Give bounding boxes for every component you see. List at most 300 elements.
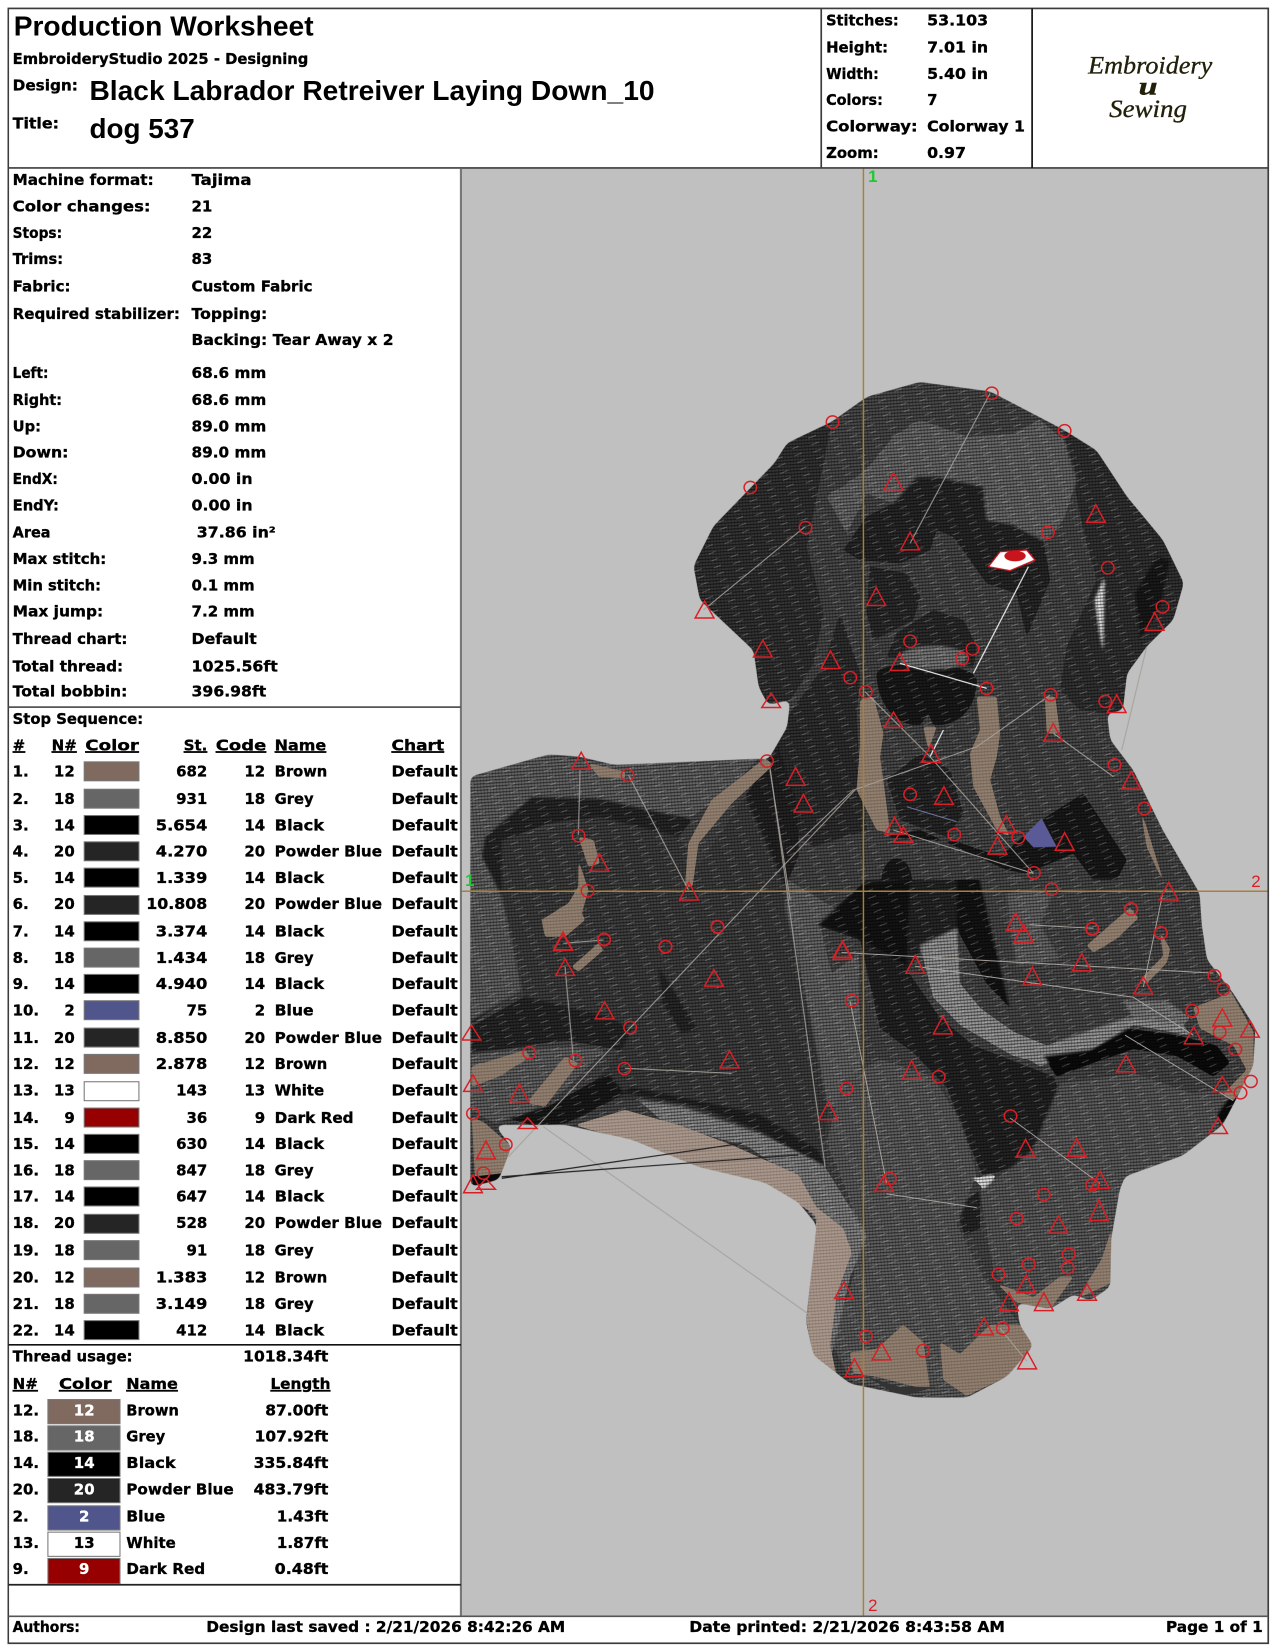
header panel: design statistics (826, 11, 1025, 162)
stop rows: 630 (176, 1135, 207, 1153)
thread rows (13, 1401, 328, 1578)
stop rows: Black (275, 1321, 325, 1339)
stitch hatch overlay (463, 374, 1263, 1405)
stop rows: Default (391, 923, 458, 941)
stop rows: Default (391, 1295, 458, 1313)
stop rows (13, 763, 458, 1339)
stop rows: Default (391, 790, 458, 808)
stop rows: 14 (54, 1188, 75, 1206)
stop rows: 12 (244, 763, 265, 781)
thread rows: Dark Red (126, 1560, 205, 1578)
stop rows: 18 (244, 949, 265, 967)
head patches (693, 420, 1183, 902)
panel: thread usage table (13, 1348, 330, 1584)
stop rows: 14 (54, 816, 75, 834)
dark jumps to the hind toe (502, 1143, 798, 1178)
stop rows: 18. (13, 1214, 39, 1232)
stop rows: 1. (13, 763, 29, 781)
stop rows: 6. (13, 895, 29, 913)
stop rows: Powder Blue (275, 895, 382, 913)
panel: machine and design details: 37.86 in² (197, 524, 276, 542)
axis labels: 2 (868, 1596, 878, 1615)
stop rows: 18 (54, 1241, 75, 1259)
header panel: design statistics: 7.01 in (927, 39, 988, 57)
stop rows: 18 (244, 1161, 265, 1179)
axis labels: 1 (868, 167, 878, 186)
stop rows: Grey (275, 1241, 314, 1259)
stop rows: 3.149 (156, 1295, 207, 1313)
panel: machine and design details: Max stitch: (13, 550, 106, 568)
panel: machine and design details: Backing: Tear Away x 2 (192, 331, 394, 349)
blue jump by the chin (907, 807, 957, 822)
footer: authors, dates and page number: Date printed: 2/21/2026 8:43:58 AM (689, 1618, 1005, 1636)
stop rows: Default (391, 1188, 458, 1206)
chin shadow (887, 753, 963, 837)
stop rows: 12 (54, 1055, 75, 1073)
header panel: design statistics: Height: (826, 39, 888, 57)
grey jumps on the body (508, 768, 855, 1315)
right leg (980, 1073, 1233, 1309)
dark band diagonal (860, 939, 1060, 1177)
stop rows: 7. (13, 923, 29, 941)
stop rows: 3.374 (156, 923, 207, 941)
left ear (693, 422, 832, 705)
paw black fringe (1043, 1028, 1230, 1077)
thread rows: Powder Blue (126, 1480, 234, 1498)
thread rows: Brown (126, 1401, 179, 1419)
table header row: Color (85, 736, 140, 754)
dog body stitching clipped to silhouette (463, 374, 1263, 1405)
stop rows: 15. (13, 1135, 39, 1153)
thread rows: 20 (74, 1480, 95, 1498)
right flank (978, 878, 1182, 1042)
thread rows: 2 (79, 1508, 89, 1526)
stop rows: Grey (275, 1161, 314, 1179)
stop rows: Default (391, 1161, 458, 1179)
stop rows: 20 (244, 1214, 265, 1232)
stop rows: 91 (187, 1241, 207, 1259)
chest top grey (1004, 877, 1024, 881)
right leg shadow (958, 1191, 995, 1292)
stop rows: 20 (54, 895, 75, 913)
colour swatches (84, 762, 139, 1340)
thread rows: 18. (13, 1428, 39, 1446)
stop rows: 14 (244, 869, 265, 887)
panel: machine and design details: Custom Fabric (192, 277, 313, 295)
thread table header: Length (270, 1375, 330, 1393)
light patch (920, 928, 1043, 1063)
thread table header (13, 1375, 330, 1393)
stop rows: 22. (13, 1321, 39, 1339)
back and flank patches (470, 747, 862, 1220)
right ear flap (1135, 557, 1170, 640)
panel: machine and design details: 0.00 in (192, 470, 253, 488)
upper stop markers: triangles and circles (554, 387, 1178, 959)
hatch over brown thread (463, 374, 1263, 1405)
flank grey (1007, 890, 1060, 966)
stop rows: Powder Blue (275, 843, 382, 861)
chest dark (745, 747, 798, 887)
panel: machine and design details: 89.0 mm (192, 444, 266, 462)
stop rows: Default (391, 843, 458, 861)
muzzle top (887, 610, 977, 667)
stop rows: 19. (13, 1241, 39, 1259)
eye (988, 550, 1035, 571)
thread rows: Blue (126, 1508, 165, 1526)
stop rows: Black (275, 923, 325, 941)
panel: machine and design details: Stops: (13, 224, 62, 242)
table header row: N# (52, 736, 77, 754)
paw toe shadows (867, 1377, 937, 1396)
stop rows: 682 (176, 763, 207, 781)
design preview canvas (461, 168, 1268, 1616)
brown flank marks (472, 758, 823, 1220)
thread rows: 87.00ft (265, 1401, 328, 1419)
stop rows: Default (391, 949, 458, 967)
ear gap (1095, 578, 1104, 650)
lower left lighter zone (472, 1047, 605, 1123)
panel: machine and design details: Max jump: (13, 603, 103, 621)
thread rows: Grey (126, 1428, 165, 1446)
stop rows: 12. (13, 1055, 39, 1073)
lower stop markers: triangles and circles (462, 903, 1259, 1377)
thread usage total: Thread usage: (13, 1348, 133, 1366)
stop rows: 14 (54, 1321, 75, 1339)
stop rows: 143 (176, 1081, 207, 1099)
stop rows: 647 (176, 1188, 207, 1206)
stop rows: 14 (54, 869, 75, 887)
header panel: design statistics: Stitches: (826, 11, 899, 29)
panel: machine and design details: 7.2 mm (192, 603, 255, 621)
thread rows: 14 (74, 1454, 95, 1472)
dark stripe (472, 997, 632, 1053)
stop rows: 20 (244, 895, 265, 913)
stop rows: Default (391, 1081, 458, 1099)
stop rows: 18 (244, 1241, 265, 1259)
stop rows: 21. (13, 1295, 39, 1313)
blue collar tag (1023, 818, 1057, 847)
neck side (763, 613, 867, 847)
stop rows: 412 (176, 1321, 207, 1339)
stop rows: 20 (54, 1029, 75, 1047)
stop rows: 18 (54, 949, 75, 967)
software line: EmbroideryStudio 2025 - Designing (13, 50, 308, 68)
stop rows: 9 (64, 1109, 75, 1127)
front leg grey inner (807, 1168, 867, 1354)
thread rows: 13. (13, 1534, 39, 1552)
stop rows: 20. (13, 1269, 39, 1287)
stop rows: 13 (244, 1081, 265, 1099)
panel: machine and design details: 21 (192, 198, 212, 216)
stop rows: Default (391, 1109, 458, 1127)
chest dark hatch (817, 880, 1010, 1008)
panel: machine and design details: Topping: (192, 305, 267, 323)
panel: machine and design details: Down: (13, 444, 68, 462)
stop rows: Brown (275, 1055, 327, 1073)
stop rows: Brown (275, 763, 327, 781)
belly dark edge (565, 1087, 825, 1167)
stop rows: 14 (54, 1135, 75, 1153)
stop rows: Brown (275, 1269, 327, 1287)
header panel: design statistics: Width: (826, 65, 879, 83)
thread swatches (48, 1400, 120, 1584)
dark fold (508, 1073, 625, 1125)
panel: machine and design details: Total thread: (13, 657, 123, 675)
thread rows: 9 (79, 1560, 89, 1578)
stop rows: 14 (54, 923, 75, 941)
stop rows: 17. (13, 1188, 39, 1206)
stop rows: 10. (13, 1001, 39, 1019)
thread rows: 0.48ft (275, 1560, 328, 1578)
stop rows: 20 (54, 1214, 75, 1232)
stop rows: 14 (244, 1188, 265, 1206)
thread table header: Color (59, 1375, 112, 1393)
stop rows: 4. (13, 843, 29, 861)
paw black base (1217, 1090, 1240, 1125)
stop rows: 14 (244, 816, 265, 834)
crosshair guide lines (461, 168, 1268, 1616)
stop rows: 9. (13, 975, 29, 993)
brown thread patches (472, 697, 1253, 1396)
axis labels (465, 167, 1261, 1615)
panel: machine and design details: Required stabilizer: (13, 305, 180, 323)
stop rows: White (275, 1081, 324, 1099)
heading: Production Worksheet: Production Worksheet (14, 10, 314, 41)
panel: machine and design details: Up: (13, 417, 41, 435)
header panel: design statistics: Zoom: (826, 144, 879, 162)
stop rows: 18 (54, 1161, 75, 1179)
panel: machine and design details: Area (13, 524, 51, 542)
panel: machine and design details: Thread chart: (13, 630, 127, 648)
nose lobes (877, 664, 977, 725)
panel: machine and design details: Min stitch: (13, 576, 101, 594)
stop rows: 9 (255, 1109, 265, 1127)
stop sequence heading: Stop Sequence: (13, 710, 143, 728)
header panel: design statistics: 53.103 (927, 11, 988, 29)
panel: machine and design details: Default (192, 630, 257, 648)
stop rows: 8. (13, 949, 29, 967)
stop rows: Default (391, 816, 458, 834)
thread rows: 1.43ft (277, 1508, 328, 1526)
thread rows: 335.84ft (254, 1454, 328, 1472)
table header row: Name (275, 736, 326, 754)
hind toe black (472, 1173, 502, 1187)
lighter back strip (470, 755, 758, 1020)
header panel: design statistics: Colorway: (826, 118, 918, 136)
stop rows: 12 (244, 1055, 265, 1073)
panel: machine and design details: 0.1 mm (192, 576, 255, 594)
stop rows: 2 (255, 1001, 265, 1019)
thread usage total value: 1018.34ft (243, 1348, 328, 1366)
logo: Embroidery and Sewing: u (1139, 73, 1158, 101)
stop rows: 20 (54, 843, 75, 861)
panel: machine and design details: Color changes: (13, 198, 150, 216)
thread rows: 1.87ft (277, 1534, 328, 1552)
brown leg and paw marks (800, 908, 1253, 1396)
panel: machine and design details: 0.00 in (192, 496, 253, 514)
panel: stop sequence table (13, 710, 458, 1340)
stop rows: 18 (54, 1295, 75, 1313)
title label: Title: (13, 114, 59, 132)
panel: machine and design details: 89.0 mm (192, 417, 266, 435)
panel: machine and design details: Fabric: (13, 277, 71, 295)
stop rows: 20 (244, 843, 265, 861)
footer: authors, dates and page number: Page 1 of 1 (1166, 1618, 1263, 1636)
stop rows: 5. (13, 869, 29, 887)
stop rows: Powder Blue (275, 1214, 382, 1232)
front leg (827, 1059, 1020, 1397)
silhouette base fill (463, 374, 1263, 1405)
panel: machine and design details: EndY: (13, 496, 59, 514)
brown head marks (857, 697, 1167, 890)
stop rows: Black (275, 869, 325, 887)
chest black blob (880, 858, 914, 880)
stop rows: Default (391, 1321, 458, 1339)
footer: authors, dates and page number: Design last saved : 2/21/2026 8:42:26 AM (206, 1618, 565, 1636)
table header row: Code (216, 736, 266, 754)
panel: machine and design details: 22 (192, 224, 212, 242)
collar (883, 793, 1127, 887)
stop rows: 2.878 (156, 1055, 207, 1073)
stop rows: Default (391, 869, 458, 887)
panel: machine and design details: Right: (13, 391, 62, 409)
stop rows: Black (275, 816, 325, 834)
stop rows: Default (391, 1214, 458, 1232)
forehead brush (827, 420, 1077, 543)
brow shadow (867, 567, 920, 640)
header panel: design statistics: 0.97 (927, 144, 966, 162)
logo: Embroidery and Sewing (1087, 52, 1213, 123)
table header row: Chart (391, 736, 444, 754)
stop rows: Default (391, 1241, 458, 1259)
panel: machine and design details: EndX: (13, 470, 58, 488)
stop rows: 18 (244, 790, 265, 808)
thread rows: 2. (13, 1508, 29, 1526)
stop rows: Default (391, 895, 458, 913)
stop rows: 847 (176, 1161, 207, 1179)
stop rows: 4.940 (156, 975, 207, 993)
thread rows: 18 (74, 1428, 95, 1446)
panel: machine and design details: Total bobbin: (13, 683, 127, 701)
panel: machine and design details: 83 (192, 250, 212, 268)
stop rows: 14 (244, 1135, 265, 1153)
stop rows: Dark Red (275, 1109, 354, 1127)
thread rows: 483.79ft (254, 1480, 328, 1498)
stop rows: 14 (54, 975, 75, 993)
stop rows: 12 (54, 1269, 75, 1287)
grey and dark patches (470, 420, 1240, 1397)
stop rows: Default (391, 1269, 458, 1287)
thread rows: 12 (74, 1401, 95, 1419)
light band (960, 994, 1190, 1066)
axis labels: 2 (1251, 872, 1261, 891)
stop rows: Powder Blue (275, 1029, 382, 1047)
dark flank interior (502, 797, 828, 1157)
stop rows: 931 (176, 790, 207, 808)
grey chunk (1123, 1001, 1190, 1025)
stop rows: Default (391, 1029, 458, 1047)
stop rows: 8.850 (156, 1029, 207, 1047)
stop rows: 528 (176, 1214, 207, 1232)
table header row (13, 736, 444, 754)
stop rows: 5.654 (156, 816, 207, 834)
stop rows: 75 (187, 1001, 207, 1019)
table header row: St. (184, 736, 207, 754)
stop rows: Black (275, 1135, 325, 1153)
stop rows: 14. (13, 1109, 39, 1127)
design label: Design: (13, 76, 78, 94)
stop rows: Black (275, 1188, 325, 1206)
stop rows: 18 (54, 790, 75, 808)
panel: machine and design details (13, 171, 394, 701)
white stitch flecks (463, 374, 1263, 1405)
leg and paw patches (800, 880, 1240, 1397)
stop rows: Blue (275, 1001, 314, 1019)
panel: machine and design details: 68.6 mm (192, 391, 266, 409)
stop rows: 12 (244, 1269, 265, 1287)
stop rows: Grey (275, 1295, 314, 1313)
design name: Black Labrador Retreiver Laying Down_10 (89, 75, 655, 106)
chest grey (785, 880, 862, 1107)
stop rows: Default (391, 975, 458, 993)
thread rows: White (126, 1534, 176, 1552)
stop rows: 12 (54, 763, 75, 781)
eye patch (843, 477, 1050, 637)
panel: machine and design details: Left: (13, 364, 48, 382)
nose highlight (900, 646, 967, 669)
stop rows: 14 (244, 923, 265, 941)
thread rows: 9. (13, 1560, 29, 1578)
header panel: design statistics: Colorway 1 (927, 118, 1025, 136)
grey jumps on the head (703, 393, 1147, 900)
stitch jump lines (502, 393, 1233, 1361)
header panel: design statistics: 7 (927, 91, 937, 109)
stop rows: 10.808 (146, 895, 207, 913)
stop rows: 13 (54, 1081, 75, 1099)
thread rows: 14. (13, 1454, 39, 1472)
under-belly grey (638, 1100, 835, 1220)
leg gap (973, 1175, 997, 1189)
stop rows: 14 (244, 1321, 265, 1339)
stop rows: 1.339 (156, 869, 207, 887)
footer: authors, dates and page number: Authors: (13, 1618, 80, 1636)
title value: dog 537 (89, 113, 195, 144)
stop rows: 2. (13, 790, 29, 808)
thread table header: Name (126, 1375, 178, 1393)
grey jumps on the legs (842, 890, 1233, 1361)
white jumps on the head (900, 567, 1028, 757)
flank vertical shadow (658, 967, 698, 1033)
stop rows: 36 (187, 1109, 207, 1127)
thread rows: 12. (13, 1401, 39, 1419)
logo: Embroidery and Sewing: Sewing (1109, 95, 1187, 123)
stop rows: Grey (275, 949, 314, 967)
stop rows: 20 (244, 1029, 265, 1047)
thread rows: 20. (13, 1480, 39, 1498)
panel: machine and design details: 1025.56ft (192, 657, 278, 675)
stop rows: 2 (64, 1001, 75, 1019)
header panel: design statistics: 5.40 in (927, 65, 988, 83)
stop rows: 13. (13, 1081, 39, 1099)
header panel: design statistics: Colors: (826, 91, 883, 109)
panel: machine and design details: 68.6 mm (192, 364, 266, 382)
stop rows: 4.270 (156, 843, 207, 861)
logo: Embroidery and Sewing: Embroidery (1087, 52, 1213, 80)
stop rows: Default (391, 1135, 458, 1153)
stop rows: Default (391, 1055, 458, 1073)
stop rows: Black (275, 975, 325, 993)
chest black left (820, 880, 910, 966)
